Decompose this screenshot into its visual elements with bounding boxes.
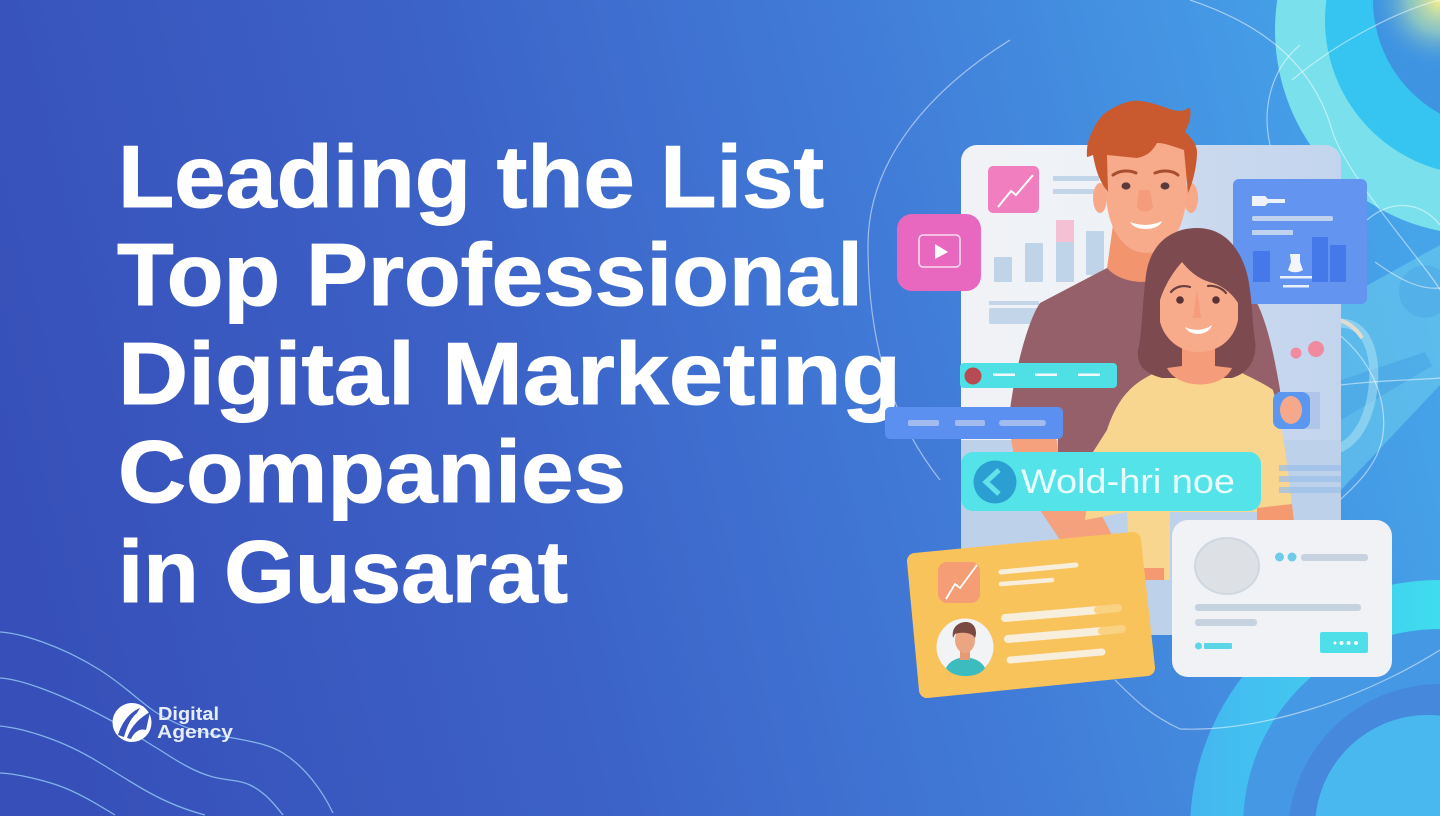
card: orange profile <box>915 540 1147 690</box>
text lines: translucent <box>1279 465 1341 493</box>
text lines <box>1001 565 1122 660</box>
woman face <box>1160 262 1238 352</box>
card: white profile <box>1172 520 1392 677</box>
man shirt <box>1010 268 1280 452</box>
man nose <box>1137 190 1153 212</box>
panel: dashboard backdrop <box>961 145 1341 635</box>
icon: key glyph <box>1252 196 1285 206</box>
icon: video play tile <box>897 214 981 291</box>
label text: Wold-hri noe <box>1021 463 1235 501</box>
icon: back chevron <box>974 460 1016 504</box>
card: blue analytics <box>1233 179 1367 304</box>
text lines <box>1053 176 1099 194</box>
title: in Gusarat <box>118 522 568 621</box>
logo wordmark: Digital <box>158 704 219 724</box>
man brows <box>1113 171 1178 175</box>
button <box>1320 632 1368 653</box>
man ears <box>1093 183 1198 213</box>
title: Leading the List <box>118 127 824 226</box>
teal label bar <box>961 452 1261 511</box>
thin circular outlines <box>868 0 1440 729</box>
woman brows <box>1171 286 1226 293</box>
man arm <box>1009 407 1113 540</box>
text lines <box>1195 554 1368 626</box>
icon: logo mark <box>112 703 152 742</box>
avatar placeholder <box>1195 538 1259 594</box>
progress <box>1195 642 1232 650</box>
man neck <box>1107 225 1177 282</box>
bar chart <box>1253 237 1346 282</box>
icon: pink trend tile <box>988 166 1039 213</box>
panel lower tint <box>961 440 1341 635</box>
woman smile <box>1185 325 1212 334</box>
man eyes <box>1122 182 1170 190</box>
decorative rings: top right <box>1275 0 1440 231</box>
decorative translucent shapes: mid right <box>1316 245 1440 490</box>
person: man <box>1009 101 1280 540</box>
status dots <box>1275 552 1296 562</box>
lower bars <box>989 301 1039 324</box>
title <box>117 127 901 621</box>
bar chart <box>994 220 1104 282</box>
blue dashed bar <box>885 407 1063 439</box>
man face <box>1104 135 1188 253</box>
icon: small avatar tile <box>1273 392 1320 429</box>
woman neck <box>1167 340 1232 384</box>
woman hair <box>1138 228 1255 378</box>
person: woman <box>1085 228 1294 580</box>
woman cuffs <box>1138 504 1294 580</box>
text lines <box>1252 216 1333 235</box>
logo wordmark: Agency <box>157 722 233 742</box>
logo wordmark <box>157 704 233 742</box>
woman shirt <box>1085 368 1293 580</box>
icon: red dot <box>964 368 982 384</box>
woman eyes <box>1176 296 1220 304</box>
title: Companies <box>118 422 626 521</box>
underlines <box>1280 276 1312 288</box>
decorative wave lines <box>0 632 333 815</box>
teal progress bar <box>960 363 1117 388</box>
logo: Digital Agency <box>112 703 233 742</box>
man smile <box>1130 221 1162 229</box>
icon: bell glyph <box>1288 254 1303 272</box>
title: Digital Marketing <box>118 324 901 423</box>
pink dots <box>1290 341 1324 358</box>
woman nose <box>1193 290 1201 318</box>
title: Top Professional <box>117 225 863 324</box>
decorative rings: bottom right <box>1190 580 1440 816</box>
icon: trend tile <box>938 562 980 603</box>
man hair <box>1087 101 1197 193</box>
icon: avatar <box>936 618 994 676</box>
